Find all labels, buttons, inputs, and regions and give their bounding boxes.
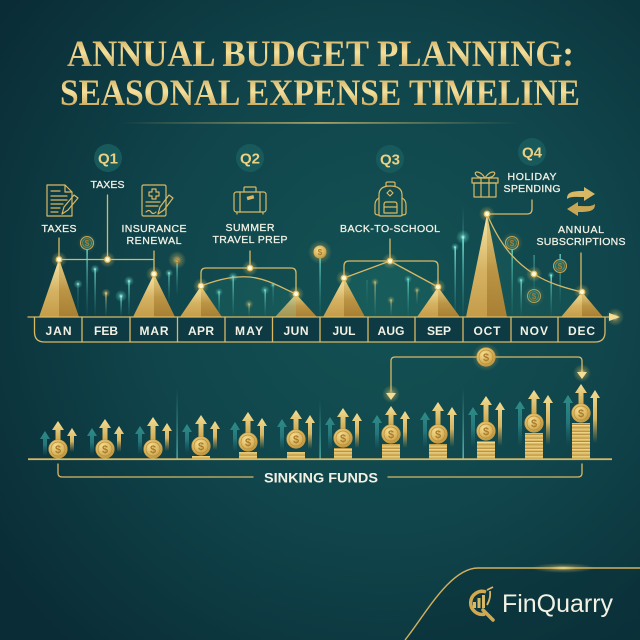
peak: Jan [39,259,79,317]
fund column: Dec [563,384,600,459]
month timeline [28,317,610,342]
icon: tax document [47,185,78,216]
peak: Dec [561,292,603,317]
label: insurance renewal: RENEWAL [126,235,182,247]
fund column: Jun: $ [293,434,299,446]
label: January taxes: TAXES [42,223,76,235]
allocation connector: $ [483,352,489,364]
timeline arrow [606,308,624,326]
funds baseline [28,458,612,460]
Q2 connectors [193,251,304,317]
footer curve [405,563,640,640]
quarter badge: Q3: Q3 [380,152,400,168]
label: summer travel prep: SUMMER [226,222,275,234]
month timeline: AUG [378,324,404,338]
icon: renewal arrows [567,187,595,216]
fund column: May: $ [245,437,251,449]
fund column: Nov: $ [531,418,537,430]
label: sinking funds: SINKING FUNDS [264,470,378,486]
fund column: Mar [135,417,172,458]
floating coins: $ [175,256,180,265]
month timeline: SEP [427,324,451,338]
icon: magnifier chart [471,587,493,620]
allocation connector [382,343,591,403]
quarter badge: Q4: Q4 [522,144,543,162]
quarter badge: Q1 [94,144,122,172]
label: Q1 taxes: TAXES [90,179,124,191]
fund column: Jul: $ [340,433,346,445]
label: summer travel prep [212,222,288,246]
peak: Jun [275,294,317,317]
fund column: Oct: $ [483,426,489,438]
month timeline: APR [188,324,214,338]
icon: suitcase [234,187,266,214]
floating coins: $ [558,262,563,271]
month timeline: DEC [568,324,595,338]
fund column: Jun [277,410,315,459]
fund column: Aug: $ [388,429,394,441]
month timeline: JAN [46,324,72,338]
fund column: Nov [515,390,553,459]
label: annual subscriptions: ANNUAL [558,224,604,236]
fund column: Apr [182,415,220,459]
fund column: Jul [325,408,362,459]
label: holiday spending: SPENDING [504,183,560,195]
Q4 connectors [479,200,590,317]
quarter badge: Q2 [236,144,264,172]
label: back-to-school: BACK-TO-SCHOOL [340,223,440,235]
label: annual subscriptions [536,224,626,248]
quarter badge: Q1: Q1 [98,150,118,168]
fund column: Jan [40,421,77,458]
icon: backpack [375,182,406,216]
fund column: May [230,412,267,459]
icon: insurance document [142,185,173,216]
fund column: Apr: $ [198,441,204,453]
title [60,34,580,114]
fund column: Dec: $ [578,408,584,420]
light streaks [176,388,464,459]
quarter badge: Q2: Q2 [240,150,260,168]
footer panel [405,568,640,640]
title: ANNUAL BUDGET PLANNING: [67,34,574,75]
floating coins: $ [532,292,537,301]
label: insurance renewal: INSURANCE [122,223,186,235]
label: summer travel prep: TRAVEL PREP [212,234,288,246]
fund column: Mar: $ [150,444,156,456]
fund column: Feb: $ [102,444,108,456]
fund column: Jan: $ [55,444,61,456]
floating coins: $ [318,248,323,257]
fund column: Sep: $ [435,429,441,441]
floating coins: $ [85,239,90,248]
floating coins: $ [510,239,515,248]
sinking funds bracket [58,464,582,477]
fund column: Sep [420,402,457,459]
peak: Jul [323,278,365,317]
fund column: Aug [372,406,410,459]
sparkle dots [74,230,554,308]
month timeline: MAR [140,324,169,338]
label: holiday spending: HOLIDAY [508,171,556,183]
month timeline: OCT [474,324,501,338]
icon: gift [472,172,498,197]
quarter badge: Q3 [376,145,404,173]
logo: FinQuarry [471,587,613,620]
quarter badge: Q4 [518,138,546,166]
Q3 connectors [336,239,446,317]
label: insurance renewal [122,223,186,247]
label: annual subscriptions: SUBSCRIPTIONS [536,236,626,248]
month timeline: FEB [94,324,118,338]
floating coins [77,232,566,307]
sparkle light bars [78,205,561,316]
label: holiday spending [504,171,560,195]
wordmark: FinQuarry [502,590,613,618]
title: SEASONAL EXPENSE TIMELINE [60,73,580,114]
peak: Apr [180,286,222,317]
month timeline: JUL [332,324,356,338]
peak: Mar [133,274,175,317]
month timeline: NOV [520,324,548,338]
peak: Sep [417,287,460,317]
peak: Oct [466,214,507,317]
Q1 connectors [51,195,162,282]
fund column: Feb [87,419,124,458]
fund column: Oct [468,396,505,459]
month timeline: JUN [284,324,308,338]
month timeline: MAY [235,324,263,338]
